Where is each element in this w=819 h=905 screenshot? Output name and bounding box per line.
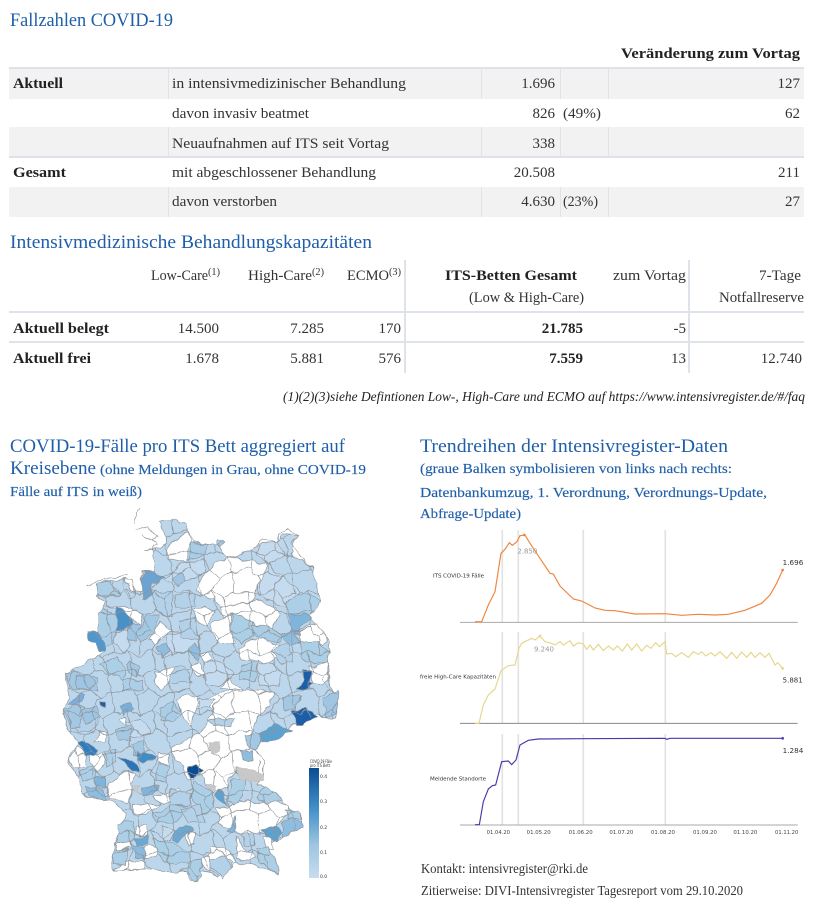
- row: abgeschlossene Behandlung: Gesamt: [13, 165, 66, 181]
- table column headers: Notfallreserve: [719, 290, 804, 306]
- row: Neuaufnahmen: Neuaufnahmen auf ITS seit Vortag: [172, 136, 390, 152]
- table column headers: ITS-Betten Gesamt: [445, 268, 577, 284]
- row: davon verstorben: [172, 194, 800, 210]
- table column headers: (3): [389, 267, 401, 278]
- chart: ITS COVID-19 Fälle: [433, 534, 803, 622]
- chart: Meldende Standorte: Meldende Standorte: [430, 776, 486, 782]
- chart: freie High-Care Kapazitäten: [420, 635, 803, 723]
- districts without reports in grey: [134, 742, 263, 793]
- row: Aktuell frei: 576: [378, 351, 402, 367]
- chart: Meldende Standorte: 01.04.20: [487, 830, 510, 836]
- map legend: 0.1: [320, 850, 327, 856]
- map legend: pro ITS Bett: [310, 763, 330, 769]
- row: abgeschlossene Behandlung: 211: [778, 165, 800, 181]
- choropleth map of Germany: [60, 500, 340, 890]
- heading: trend title: [420, 437, 767, 522]
- map legend: 0.2: [320, 825, 327, 831]
- row: Aktuell belegt: 170: [378, 321, 401, 337]
- map legend: 0.3: [320, 799, 327, 805]
- row: davon invasiv beatmet: 826: [532, 106, 556, 122]
- table column headers: Low-Care: [151, 268, 208, 284]
- row: Aktuell frei: Aktuell frei: [13, 351, 91, 367]
- row: in intensivmedizinischer Behandlung: 1.696: [521, 76, 556, 92]
- table column headers: [151, 267, 804, 306]
- row: davon invasiv beatmet: (49%): [563, 106, 601, 122]
- chart: Meldende Standorte: 1.284: [783, 747, 804, 755]
- table backgrounds and rules: [9, 67, 804, 217]
- row: davon invasiv beatmet: 62: [785, 106, 800, 122]
- row: abgeschlossene Behandlung: mit abgeschlossener Behandlung: [172, 165, 377, 181]
- heading: trend title: (graue Balken symbolisieren von links nach rechts:: [420, 462, 732, 477]
- grey event bars: [502, 530, 666, 825]
- row: in intensivmedizinischer Behandlung: in intensivmedizinischer Behandlung: [172, 76, 407, 92]
- row: Neuaufnahmen: [172, 136, 555, 152]
- chart: Meldende Standorte: 01.11.20: [775, 830, 798, 836]
- heading: Fallzahlen: Fallzahlen COVID-19: [10, 11, 173, 31]
- row: Aktuell belegt: [13, 321, 686, 337]
- row: Aktuell frei: 1.678: [185, 351, 219, 367]
- table column headers: zum Vortag: [613, 268, 687, 284]
- row: Aktuell belegt: 21.785: [542, 321, 583, 337]
- row: davon invasiv beatmet: davon invasiv beatmet: [172, 106, 310, 122]
- chart: freie High-Care Kapazitäten: 9.240: [534, 646, 554, 654]
- map legend: COVID-19-Fälle: [310, 759, 332, 765]
- map silhouette: [63, 519, 337, 883]
- map districts: [60, 500, 340, 890]
- row: Aktuell frei: [13, 351, 802, 367]
- footnote: (1)(2)(3)siehe Defintionen Low-, High-Care und ECMO auf https://www.intensivregister.de/#/faq: [283, 389, 805, 404]
- chart: Meldende Standorte: 01.08.20: [651, 830, 675, 836]
- row: davon verstorben: davon verstorben: [172, 194, 278, 210]
- row: Aktuell frei: 5.881: [290, 351, 324, 367]
- row: Aktuell belegt: 7.285: [290, 321, 324, 337]
- table rules: [9, 260, 804, 373]
- row: davon verstorben: 27: [785, 194, 800, 210]
- heading: map title: Fälle auf ITS in weiß): [10, 485, 142, 500]
- chart: Meldende Standorte: 01.10.20: [733, 830, 757, 836]
- heading: map title: [10, 437, 366, 500]
- row: abgeschlossene Behandlung: [13, 165, 800, 181]
- chart: ITS COVID-19 Fälle: ITS COVID-19 Fälle: [433, 573, 484, 579]
- contact line: Kontakt: intensivregister@rki.de: [421, 862, 588, 877]
- row: in intensivmedizinischer Behandlung: Aktuell: [13, 76, 63, 92]
- row: Aktuell belegt: -5: [674, 321, 686, 337]
- coastline and islands: [87, 508, 313, 600]
- chart: Meldende Standorte: 01.05.20: [527, 830, 551, 836]
- heading: map title: COVID-19-Fälle pro ITS Bett aggregiert auf: [10, 437, 346, 457]
- trend charts: [420, 530, 804, 836]
- row: Aktuell belegt: 14.500: [178, 321, 219, 337]
- table column headers: High-Care: [248, 268, 312, 284]
- row: Aktuell frei: 12.740: [761, 351, 802, 367]
- heading: map title: Kreisebene: [10, 459, 96, 479]
- panel: case table: [9, 46, 804, 217]
- district border mesh: [60, 500, 340, 890]
- northern districts: [65, 532, 330, 690]
- heading: Behandlungskapazitäten: Intensivmedizinische Behandlungskapazitäten: [10, 233, 372, 253]
- table column headers: ECMO: [347, 268, 389, 284]
- map legend: 0.4: [320, 774, 327, 780]
- heading: trend title: Abfrage-Update): [420, 507, 521, 522]
- table column headers: (2): [312, 267, 324, 278]
- row: Aktuell frei: 7.559: [549, 351, 583, 367]
- heading: map title: (ohne Meldungen in Grau, ohne COVID-19: [100, 463, 366, 478]
- row: davon invasiv beatmet: [172, 106, 800, 122]
- row: davon verstorben: 4.630: [521, 194, 555, 210]
- chart: ITS COVID-19 Fälle: 1.696: [783, 559, 803, 567]
- table column headers: (1): [208, 267, 220, 278]
- chart: freie High-Care Kapazitäten: freie High-Care Kapazitäten: [420, 675, 496, 681]
- heading: trend title: Trendreihen der Intensivregister-Daten: [420, 437, 728, 457]
- row: Neuaufnahmen: 338: [532, 136, 555, 152]
- chart: Meldende Standorte: [430, 737, 804, 836]
- southern districts: [63, 690, 337, 883]
- row: abgeschlossene Behandlung: 20.508: [514, 165, 555, 181]
- map legend: 0.0: [320, 874, 327, 880]
- table header: Veränderung zum Vortag: [621, 46, 801, 62]
- chart: Meldende Standorte: 01.07.20: [609, 830, 633, 836]
- row: in intensivmedizinischer Behandlung: 127: [778, 76, 800, 92]
- chart: Meldende Standorte: 01.09.20: [693, 830, 717, 836]
- table column headers: 7-Tage: [759, 268, 801, 284]
- map legend: [309, 759, 332, 880]
- row: Aktuell frei: 13: [671, 351, 686, 367]
- chart: Meldende Standorte: 01.06.20: [569, 830, 593, 836]
- chart: ITS COVID-19 Fälle: 2.850: [517, 547, 537, 555]
- table column headers: (Low & High-Care): [469, 290, 584, 306]
- row: davon verstorben: (23%): [563, 194, 598, 210]
- row: in intensivmedizinischer Behandlung: [13, 76, 800, 92]
- panel: capacity table: [9, 260, 804, 373]
- citation line: Zitierweise: DIVI-Intensivregister Tagesreport vom 29.10.2020: [421, 884, 743, 899]
- chart: freie High-Care Kapazitäten: 5.881: [783, 677, 803, 685]
- heading: trend title: Datenbankumzug, 1. Verordnung, Verordnungs-Update,: [420, 486, 767, 501]
- row: Aktuell belegt: Aktuell belegt: [13, 321, 109, 337]
